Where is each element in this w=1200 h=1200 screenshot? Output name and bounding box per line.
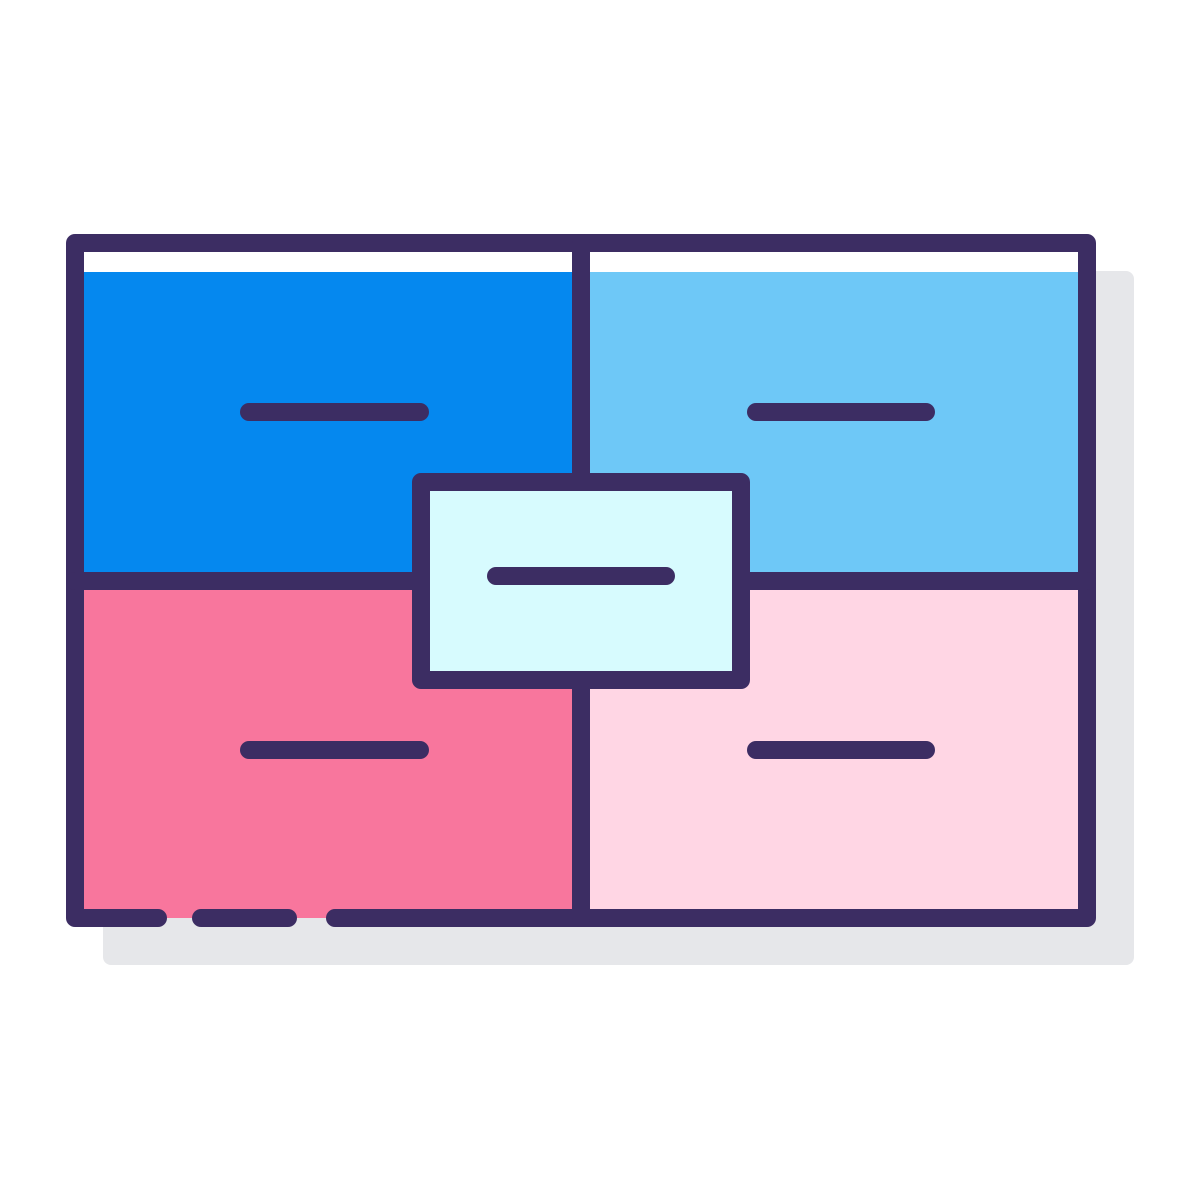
panel: center box: [421, 482, 741, 680]
shadow: [103, 271, 1134, 965]
text lines: [249, 412, 926, 750]
panel: background white: [75, 243, 1087, 918]
panel: bottom-right light pink: [581, 581, 1087, 918]
frame outline: [75, 243, 1087, 918]
panel: top-right light blue: [581, 272, 1087, 581]
panel: bottom-left pink: [75, 581, 581, 918]
panel: top-left blue: [75, 272, 581, 581]
